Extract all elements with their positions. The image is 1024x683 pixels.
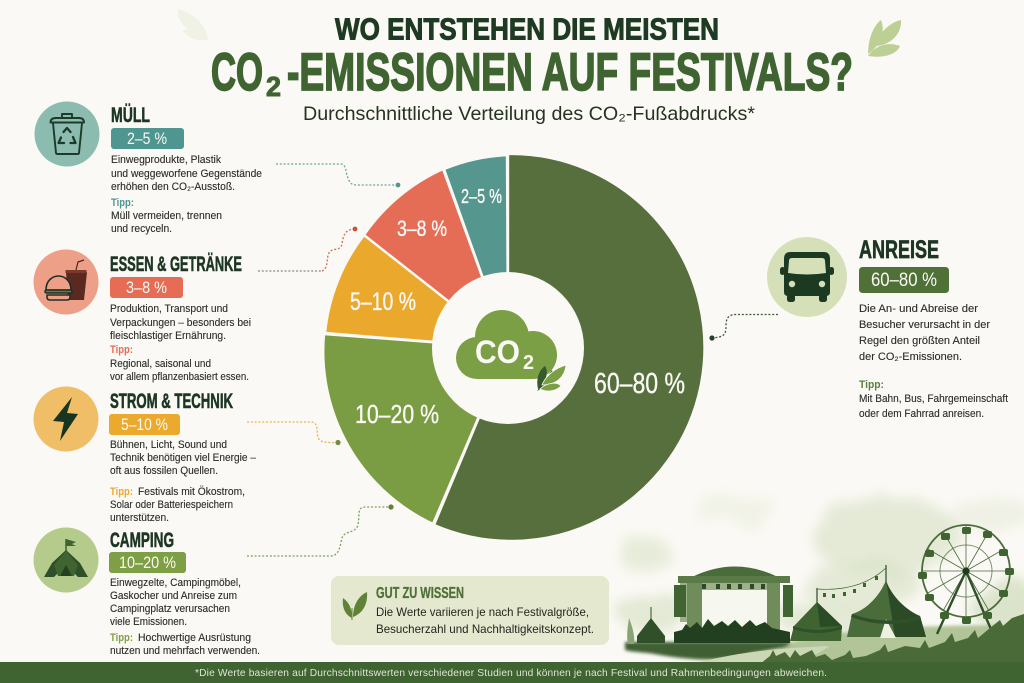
connector: Essen bbox=[258, 227, 357, 271]
festival landscape illustration bbox=[615, 494, 1024, 665]
heading: GUT ZU WISSEN bbox=[376, 585, 464, 602]
title line 1: WO ENTSTEHEN DIE MEISTEN bbox=[335, 12, 719, 46]
tip: Hochwertige Ausrüstung bbox=[138, 632, 251, 644]
tip: Tipp: bbox=[859, 379, 884, 391]
heading: STROM & TECHNIK bbox=[110, 390, 233, 413]
badge bbox=[109, 414, 180, 435]
value labels bbox=[350, 186, 685, 429]
heading: MÜLL bbox=[111, 104, 150, 127]
icon: CO2 cloud: CO bbox=[475, 334, 520, 370]
stage bbox=[674, 566, 793, 643]
value labels: 60–80 % bbox=[594, 368, 685, 400]
panel: Anreise bbox=[767, 236, 1008, 420]
slice: Anreise bbox=[434, 154, 704, 541]
badge bbox=[111, 128, 184, 149]
footnote: *Die Werte basieren auf Durchschnittswerten verschiedener Studien und können je nach Festival und Rahmenbedingungen abweichen. bbox=[195, 668, 827, 679]
description: erhöhen den CO₂-Ausstoß. bbox=[111, 181, 235, 193]
decorative leaf top right bbox=[868, 20, 901, 57]
panel: Gut zu wissen bbox=[331, 576, 609, 645]
watercolor clouds bbox=[615, 494, 1024, 634]
text: Die Werte variieren je nach Festivalgröße, bbox=[376, 605, 589, 619]
description bbox=[859, 303, 990, 363]
panel: Strom & Technik bbox=[34, 386, 256, 524]
badge: 5–10 % bbox=[121, 416, 168, 434]
tip: vor allem pflanzenbasiert essen. bbox=[110, 371, 249, 383]
description: und weggeworfene Gegenstände bbox=[111, 168, 262, 180]
panel: Essen & Getränke bbox=[34, 250, 251, 383]
center hole bbox=[432, 272, 584, 424]
connector: Anreise bbox=[709, 314, 778, 341]
value labels: 2–5 % bbox=[461, 186, 502, 208]
heading: ESSEN & GETRÄNKE bbox=[110, 253, 242, 276]
description: Einwegprodukte, Plastik bbox=[111, 154, 222, 166]
tip: Mit Bahn, Bus, Fahrgemeinschaft bbox=[859, 393, 1008, 405]
slice: Camping bbox=[323, 334, 508, 524]
icon: leaf bbox=[343, 592, 367, 620]
bunting bbox=[817, 568, 886, 598]
tip: und recyceln. bbox=[111, 223, 172, 235]
description: fleischlastiger Ernährung. bbox=[110, 330, 226, 342]
title line 2: CO bbox=[211, 43, 263, 102]
description: Bühnen, Licht, Sound und bbox=[110, 439, 227, 451]
tip: Tipp: bbox=[110, 486, 133, 498]
description: Einwegzelte, Campingmöbel, bbox=[110, 577, 241, 589]
icon: bus bbox=[767, 237, 847, 317]
small tent bbox=[627, 607, 665, 644]
value labels: 5–10 % bbox=[350, 288, 416, 316]
badge: 2–5 % bbox=[127, 130, 167, 148]
description: Die An- und Abreise der bbox=[859, 303, 978, 315]
badge: 60–80 % bbox=[871, 269, 937, 291]
title bbox=[211, 12, 853, 102]
description: der CO₂-Emissionen. bbox=[859, 351, 962, 363]
text bbox=[376, 605, 594, 636]
description: Besucher verursacht in der bbox=[859, 319, 990, 331]
description: Campingplatz verursachen bbox=[110, 603, 230, 615]
icon: tent bbox=[34, 528, 98, 592]
text: Besucherzahl und Nachhaltigkeitskonzept. bbox=[376, 622, 594, 636]
tip: Regional, saisonal und bbox=[110, 358, 211, 370]
decorative leaf top left bbox=[178, 9, 208, 40]
tent large bbox=[847, 565, 926, 638]
tip: Tipp: bbox=[111, 197, 134, 209]
foreground grass bbox=[760, 614, 1024, 665]
icon: lightning bolt bbox=[34, 386, 98, 452]
description: Verpackungen – besonders bei bbox=[110, 317, 251, 329]
description: oft aus fossilen Quellen. bbox=[110, 465, 218, 477]
description: Gaskocher und Anreise zum bbox=[110, 590, 237, 602]
donut chart bbox=[323, 154, 704, 541]
tip: nutzen und mehrfach verwenden. bbox=[110, 645, 260, 657]
connector: Camping bbox=[247, 504, 394, 556]
badge: 3–8 % bbox=[126, 279, 167, 297]
badge bbox=[110, 277, 183, 298]
description bbox=[110, 439, 256, 477]
tip: Müll vermeiden, trennen bbox=[111, 210, 222, 222]
heading: ANREISE bbox=[859, 236, 939, 264]
icon: CO2 cloud: 2 bbox=[523, 352, 534, 374]
description bbox=[110, 577, 241, 628]
panel: Camping bbox=[34, 528, 260, 657]
icon: recycling bin bbox=[34, 102, 100, 166]
badge: 10–20 % bbox=[119, 554, 176, 572]
description: Technik benötigen viel Energie – bbox=[110, 452, 256, 464]
tip: Tipp: bbox=[110, 632, 133, 644]
description: Regel den größten Anteil bbox=[859, 335, 980, 347]
title line 2 bbox=[211, 43, 853, 102]
slice: Strom bbox=[325, 235, 508, 348]
tip bbox=[111, 197, 222, 235]
meadow bbox=[625, 625, 1024, 665]
value labels: 10–20 % bbox=[355, 399, 439, 429]
value labels: 3–8 % bbox=[397, 216, 447, 241]
subtitle: Durchschnittliche Verteilung des CO₂-Fußabdrucks* bbox=[303, 103, 755, 125]
footer bar bbox=[0, 662, 1024, 683]
tip: oder dem Fahrrad anreisen. bbox=[859, 408, 984, 420]
tip: Solar oder Batteriespeichern bbox=[110, 499, 233, 511]
tip bbox=[110, 486, 245, 524]
tip bbox=[859, 379, 1008, 420]
title line 2: 2 bbox=[266, 71, 281, 102]
description: Produktion, Transport und bbox=[110, 303, 228, 315]
description bbox=[110, 303, 251, 342]
icon: burger and drink bbox=[34, 250, 98, 314]
description bbox=[111, 154, 262, 193]
tent middle bbox=[790, 588, 842, 641]
slice: Essen bbox=[364, 169, 508, 348]
ferris wheel bbox=[918, 525, 1014, 634]
tip: Tipp: bbox=[110, 344, 133, 356]
slice: Müll bbox=[444, 155, 508, 348]
description: viele Emissionen. bbox=[110, 616, 187, 628]
tip bbox=[110, 344, 249, 383]
connector: Strom bbox=[247, 422, 341, 445]
connector: Müll bbox=[276, 164, 400, 187]
icon: CO2 cloud bbox=[456, 310, 566, 391]
heading: CAMPING bbox=[110, 529, 174, 552]
panel: Müll bbox=[34, 102, 262, 235]
tip: unterstützen. bbox=[110, 512, 169, 524]
tip: Festivals mit Ökostrom, bbox=[138, 486, 245, 498]
tip bbox=[110, 632, 260, 657]
